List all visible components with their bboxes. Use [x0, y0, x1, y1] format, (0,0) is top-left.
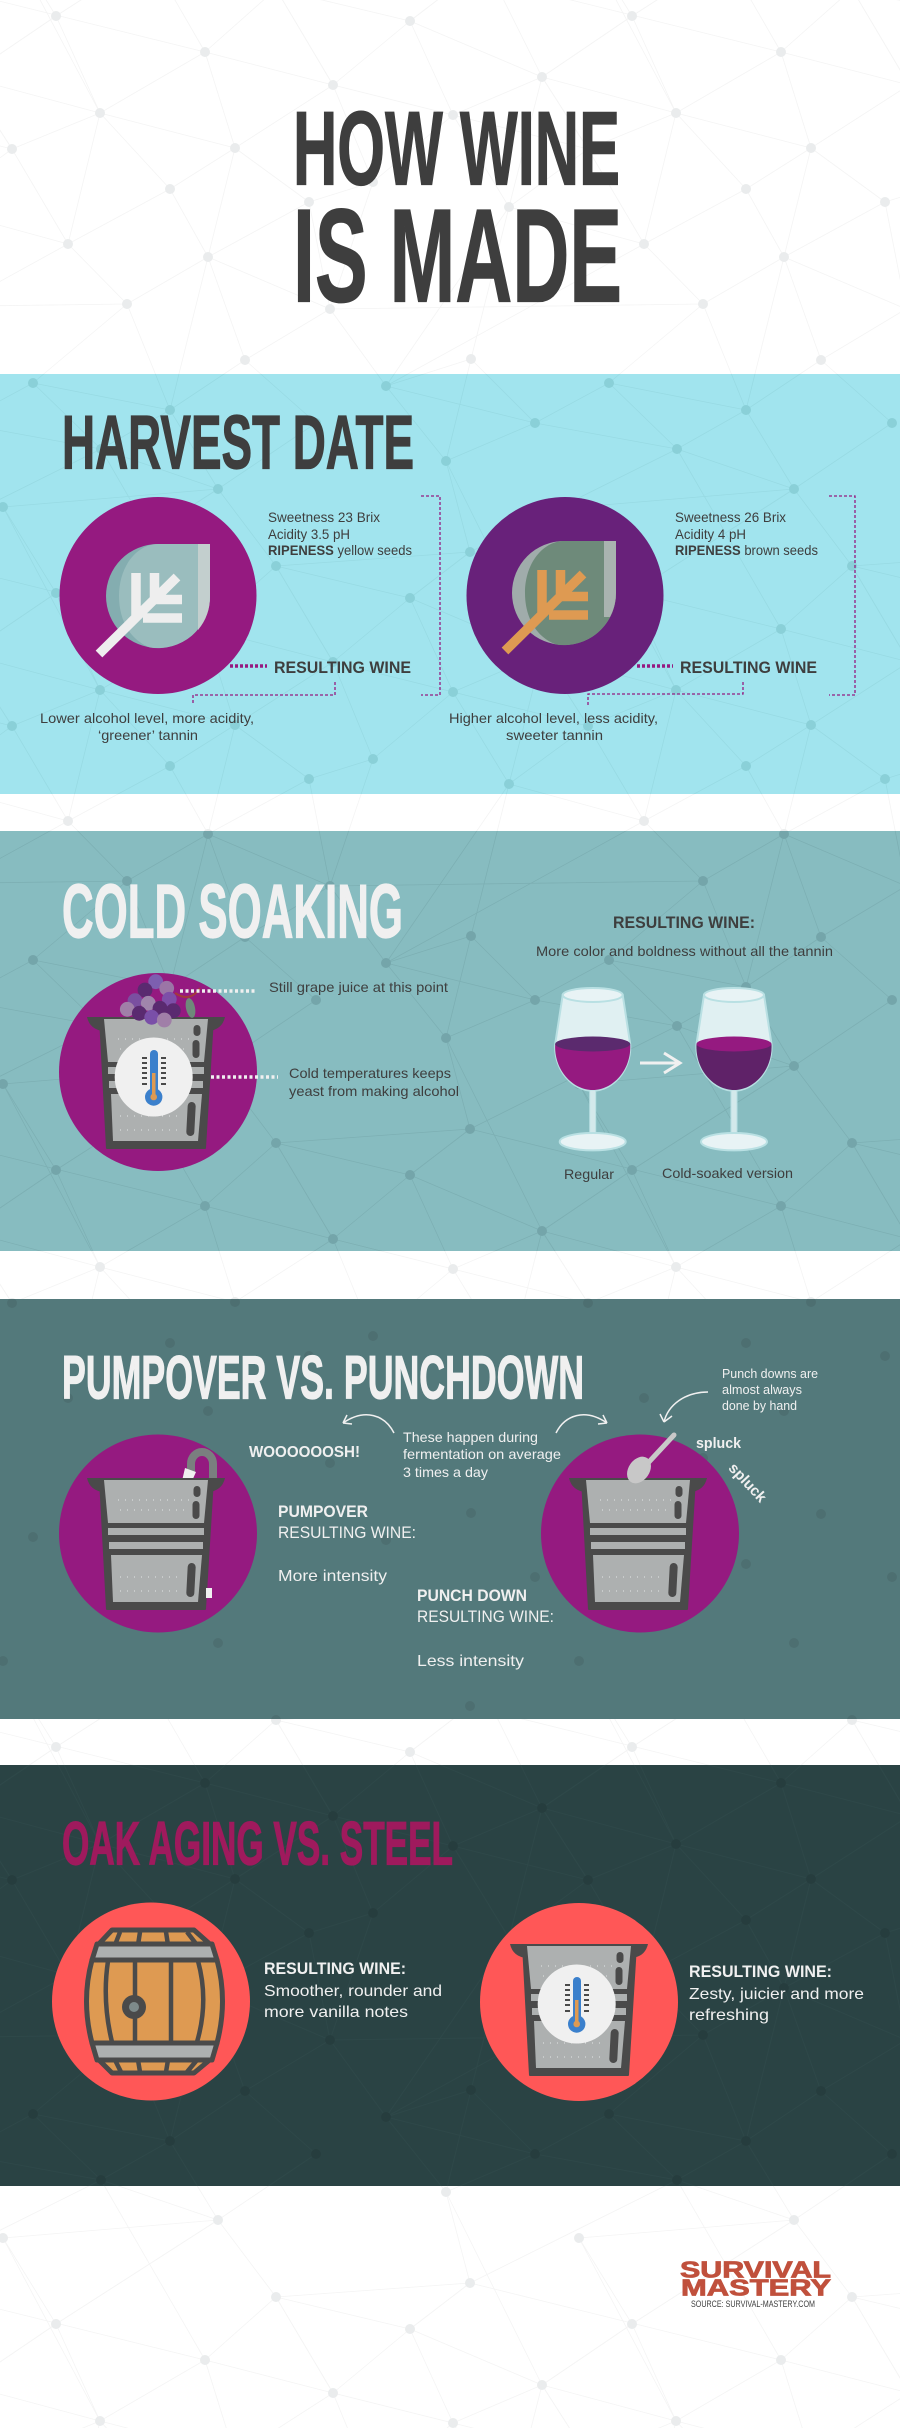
text: steel result: RESULTING WINE:	[689, 1962, 832, 1981]
heading: oak aging vs steel: OAK AGING VS. STEEL	[62, 1810, 453, 1878]
text: pumpover result: More intensity	[278, 1568, 387, 1585]
dotted leader lines	[180, 991, 278, 1077]
text: young harvest stats: Sweetness 23 Brix	[268, 509, 380, 525]
icon: regular wine glass	[555, 988, 630, 1150]
title	[293, 90, 622, 330]
panel: cold soaking	[0, 831, 900, 1251]
text: young harvest stats: RIPENESS yellow seeds	[268, 542, 412, 558]
logo: survival mastery: MASTERY	[681, 2274, 831, 2300]
text: oak result	[264, 1959, 442, 2021]
label: wooosh: WOOOOOOSH!	[249, 1444, 360, 1461]
label: regular: Regular	[564, 1166, 614, 1182]
label: spluck rotated: spluck	[725, 1460, 770, 1507]
icon: green leaf in magenta circle	[60, 497, 256, 694]
text: oak result: Smoother, rounder and	[264, 1983, 442, 2000]
text: cold temperatures	[289, 1065, 459, 1099]
text: late harvest stats: RIPENESS brown seeds	[675, 542, 818, 558]
label: spluck: spluck	[696, 1435, 742, 1452]
heading: resulting wine: RESULTING WINE:	[613, 913, 755, 932]
text: fermentation note: 3 times a day	[403, 1464, 488, 1480]
arrows: curved annotations	[343, 1392, 708, 1433]
icon: cold-soaked wine glass	[696, 988, 772, 1150]
text: punch down note: Punch downs are	[722, 1367, 818, 1381]
icon: ripe leaf in violet circle	[466, 497, 664, 694]
panel: pumpover vs punchdown	[0, 1299, 900, 1719]
text: late harvest stats: Acidity 4 pH	[675, 526, 746, 542]
text: pumpover result	[278, 1502, 416, 1585]
text: lower alcohol result: ‘greener’ tannin	[98, 727, 198, 743]
text: pumpover result: RESULTING WINE:	[278, 1523, 416, 1542]
text: fermentation note: These happen during	[403, 1429, 538, 1445]
text: punch down result	[417, 1586, 554, 1670]
icon: steel bucket with thermometer	[480, 1903, 678, 2101]
text: higher alcohol result: Higher alcohol level, less acidity,	[449, 710, 658, 726]
icon: oak barrel	[52, 1902, 250, 2100]
text: fermentation note	[403, 1429, 561, 1480]
panel: oak aging vs steel	[0, 1765, 900, 2186]
arrow: regular to cold soaked	[640, 1053, 680, 1073]
text: higher alcohol result: sweeter tannin	[506, 727, 603, 743]
heading: cold soaking: COLD SOAKING	[62, 870, 403, 954]
icon: bucket with grapes and thermometer	[59, 973, 257, 1171]
heading: harvest date: HARVEST DATE	[62, 400, 414, 486]
title: IS MADE	[293, 182, 622, 330]
title: HOW WINE	[293, 90, 620, 208]
text: cold temperatures: Cold temperatures keeps	[289, 1065, 451, 1081]
text: punch down result: Less intensity	[417, 1653, 524, 1670]
icon: pumpover bucket	[59, 1434, 257, 1632]
label: resulting wine left: RESULTING WINE	[274, 658, 411, 677]
text: steel result: refreshing	[689, 2007, 769, 2024]
text: fermentation note: fermentation on average	[403, 1446, 561, 1462]
text: young harvest stats: Acidity 3.5 pH	[268, 526, 350, 542]
text: punch down note: done by hand	[722, 1399, 797, 1413]
text: punch down note	[722, 1367, 818, 1413]
text: lower alcohol result	[40, 710, 254, 743]
text: steel result: Zesty, juicier and more	[689, 1986, 864, 2003]
text: punch down result: PUNCH DOWN	[417, 1586, 527, 1605]
text: punch down result: RESULTING WINE:	[417, 1607, 554, 1626]
text: more color: More color and boldness without all the tannin	[536, 943, 833, 959]
text: cold temperatures: yeast from making alcohol	[289, 1083, 459, 1099]
logo: survival mastery	[680, 2256, 831, 2309]
text: young harvest stats	[268, 509, 412, 558]
label: cold-soaked version: Cold-soaked version	[662, 1165, 793, 1181]
text: lower alcohol result: Lower alcohol level, more acidity,	[40, 710, 254, 726]
text: punch down note: almost always	[722, 1383, 802, 1397]
text: still grape juice: Still grape juice at this point	[269, 979, 448, 995]
brackets and connectors	[193, 496, 855, 705]
text: higher alcohol result	[449, 710, 658, 743]
text: steel result	[689, 1962, 864, 2024]
text: oak result: RESULTING WINE:	[264, 1959, 406, 1978]
panel: harvest date	[0, 374, 900, 794]
text: pumpover result: PUMPOVER	[278, 1502, 368, 1521]
logo: survival mastery: SURVIVAL	[680, 2256, 831, 2282]
text: late harvest stats: Sweetness 26 Brix	[675, 509, 786, 525]
source line: SOURCE: SURVIVAL-MASTERY.COM	[691, 2299, 815, 2309]
text: oak result: more vanilla notes	[264, 2004, 408, 2021]
label: resulting wine right: RESULTING WINE	[680, 658, 817, 677]
text: late harvest stats	[675, 509, 818, 558]
icon: punch down bucket with spoon	[541, 1434, 739, 1632]
